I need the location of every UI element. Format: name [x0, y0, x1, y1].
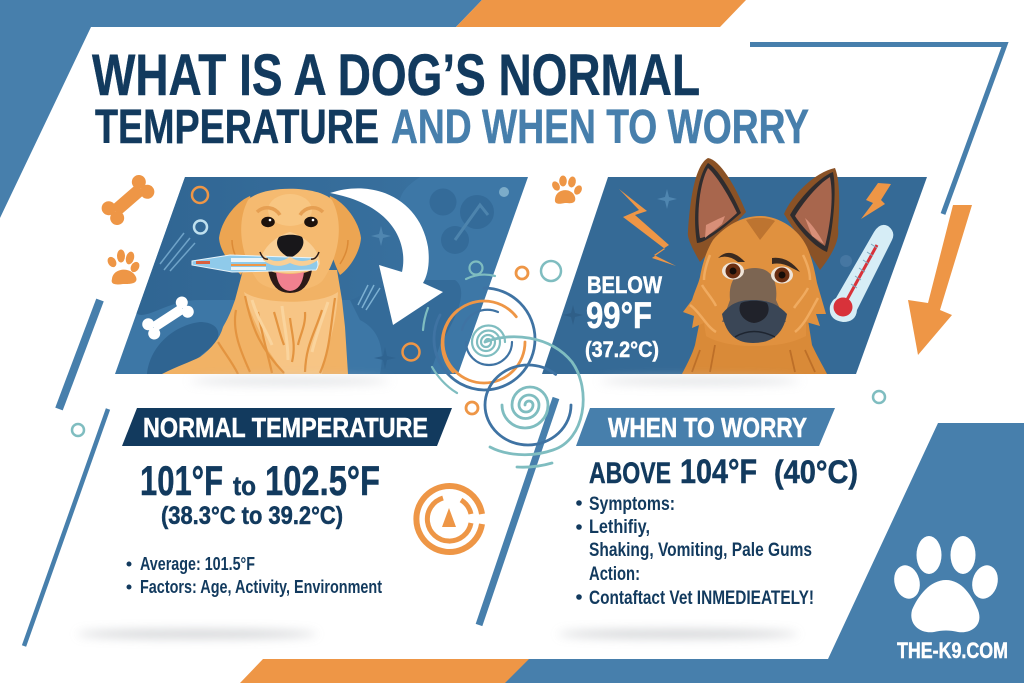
panel: normal temperature — [77, 408, 452, 638]
eyes — [261, 217, 275, 227]
title: TEMPERATURE — [95, 101, 379, 154]
neck — [682, 320, 827, 374]
below temperature text: BELOW — [587, 272, 662, 299]
head — [241, 189, 339, 290]
bullet list: Lethifiy, — [589, 517, 650, 538]
spiral graphic — [423, 261, 583, 467]
temperature range: (38.3°C to 39.2°C) — [161, 502, 343, 530]
nose — [739, 301, 769, 323]
panel background — [542, 177, 927, 374]
title — [92, 43, 809, 154]
bullet list: Average: 101.5°F — [140, 554, 255, 574]
shadow under normal panel — [190, 377, 390, 385]
orange down arrow — [908, 205, 972, 355]
decor inside panel — [563, 189, 852, 325]
lightning bolts — [619, 183, 891, 266]
icon: white bone — [140, 294, 196, 342]
background: top blue band — [0, 0, 482, 218]
bullet list: Factors: Age, Activity, Environment — [140, 577, 382, 597]
fur highlights — [690, 255, 818, 332]
shadow — [558, 630, 798, 638]
centre slanted line — [479, 398, 556, 625]
background: bottom right blue block — [505, 423, 1024, 683]
heading banner: NORMAL TEMPERATURE — [143, 412, 428, 443]
title: WHAT IS A DOG’S NORMAL — [92, 43, 700, 108]
temperature threshold: 104°F — [680, 453, 757, 491]
icon: orange paw left — [106, 250, 141, 284]
ears — [688, 158, 746, 262]
decorative corner line top right — [750, 44, 1005, 214]
below temperature text — [585, 272, 662, 362]
panel: worried dog illustration — [542, 158, 927, 374]
white curved arrow — [330, 188, 443, 325]
thermometer in mouth — [192, 252, 319, 272]
body — [162, 270, 348, 374]
panel: when to worry — [558, 408, 858, 638]
bullet list: Action: — [589, 564, 640, 585]
bullet list: Shaking, Vomiting, Pale Gums — [589, 540, 812, 561]
bullet list — [576, 494, 814, 609]
panel background — [115, 177, 528, 374]
below temperature text: (37.2°C) — [585, 337, 659, 362]
nose — [277, 235, 303, 257]
german shepherd — [682, 158, 839, 374]
ring left — [72, 424, 84, 436]
bullet list: Contaftact Vet INMEDIEATELY! — [589, 588, 814, 609]
icon: orange target gauge — [416, 486, 482, 552]
ring right — [873, 391, 885, 403]
background: top orange band — [456, 0, 746, 27]
below temperature text: 99°F — [586, 295, 652, 336]
left thick slanted line — [59, 300, 100, 409]
left long slanted line — [24, 409, 108, 646]
panel: normal dog illustration — [115, 177, 528, 374]
icon: orange bone — [99, 172, 157, 228]
shadow — [77, 630, 317, 638]
bullet list: Symptoms: — [589, 494, 675, 515]
temperature threshold — [589, 453, 858, 491]
temperature range: 102.5°F — [265, 457, 380, 504]
muzzle — [260, 232, 320, 273]
temperature threshold: (40°C) — [774, 454, 858, 490]
mouth and tongue — [268, 270, 312, 293]
brows — [718, 253, 745, 262]
eyes — [722, 262, 744, 280]
head — [683, 216, 826, 346]
golden retriever — [162, 189, 361, 374]
title: AND WHEN TO WORRY — [391, 101, 809, 154]
icon: white paw logo — [891, 536, 1001, 632]
background: bottom orange band — [240, 659, 532, 683]
icon: orange paw right — [550, 176, 584, 204]
temperature range: to — [233, 471, 256, 501]
heading banner — [576, 408, 835, 446]
mask — [722, 268, 786, 322]
ears — [219, 196, 254, 275]
temperature range: 101°F — [140, 457, 223, 504]
thermometer — [830, 225, 893, 322]
shadow under worried panel — [600, 377, 800, 385]
rings inside panel — [192, 187, 420, 360]
temperature range — [140, 457, 380, 530]
temperature threshold: ABOVE — [589, 457, 671, 490]
heading banner: WHEN TO WORRY — [608, 412, 807, 443]
bullet list — [126, 554, 382, 597]
